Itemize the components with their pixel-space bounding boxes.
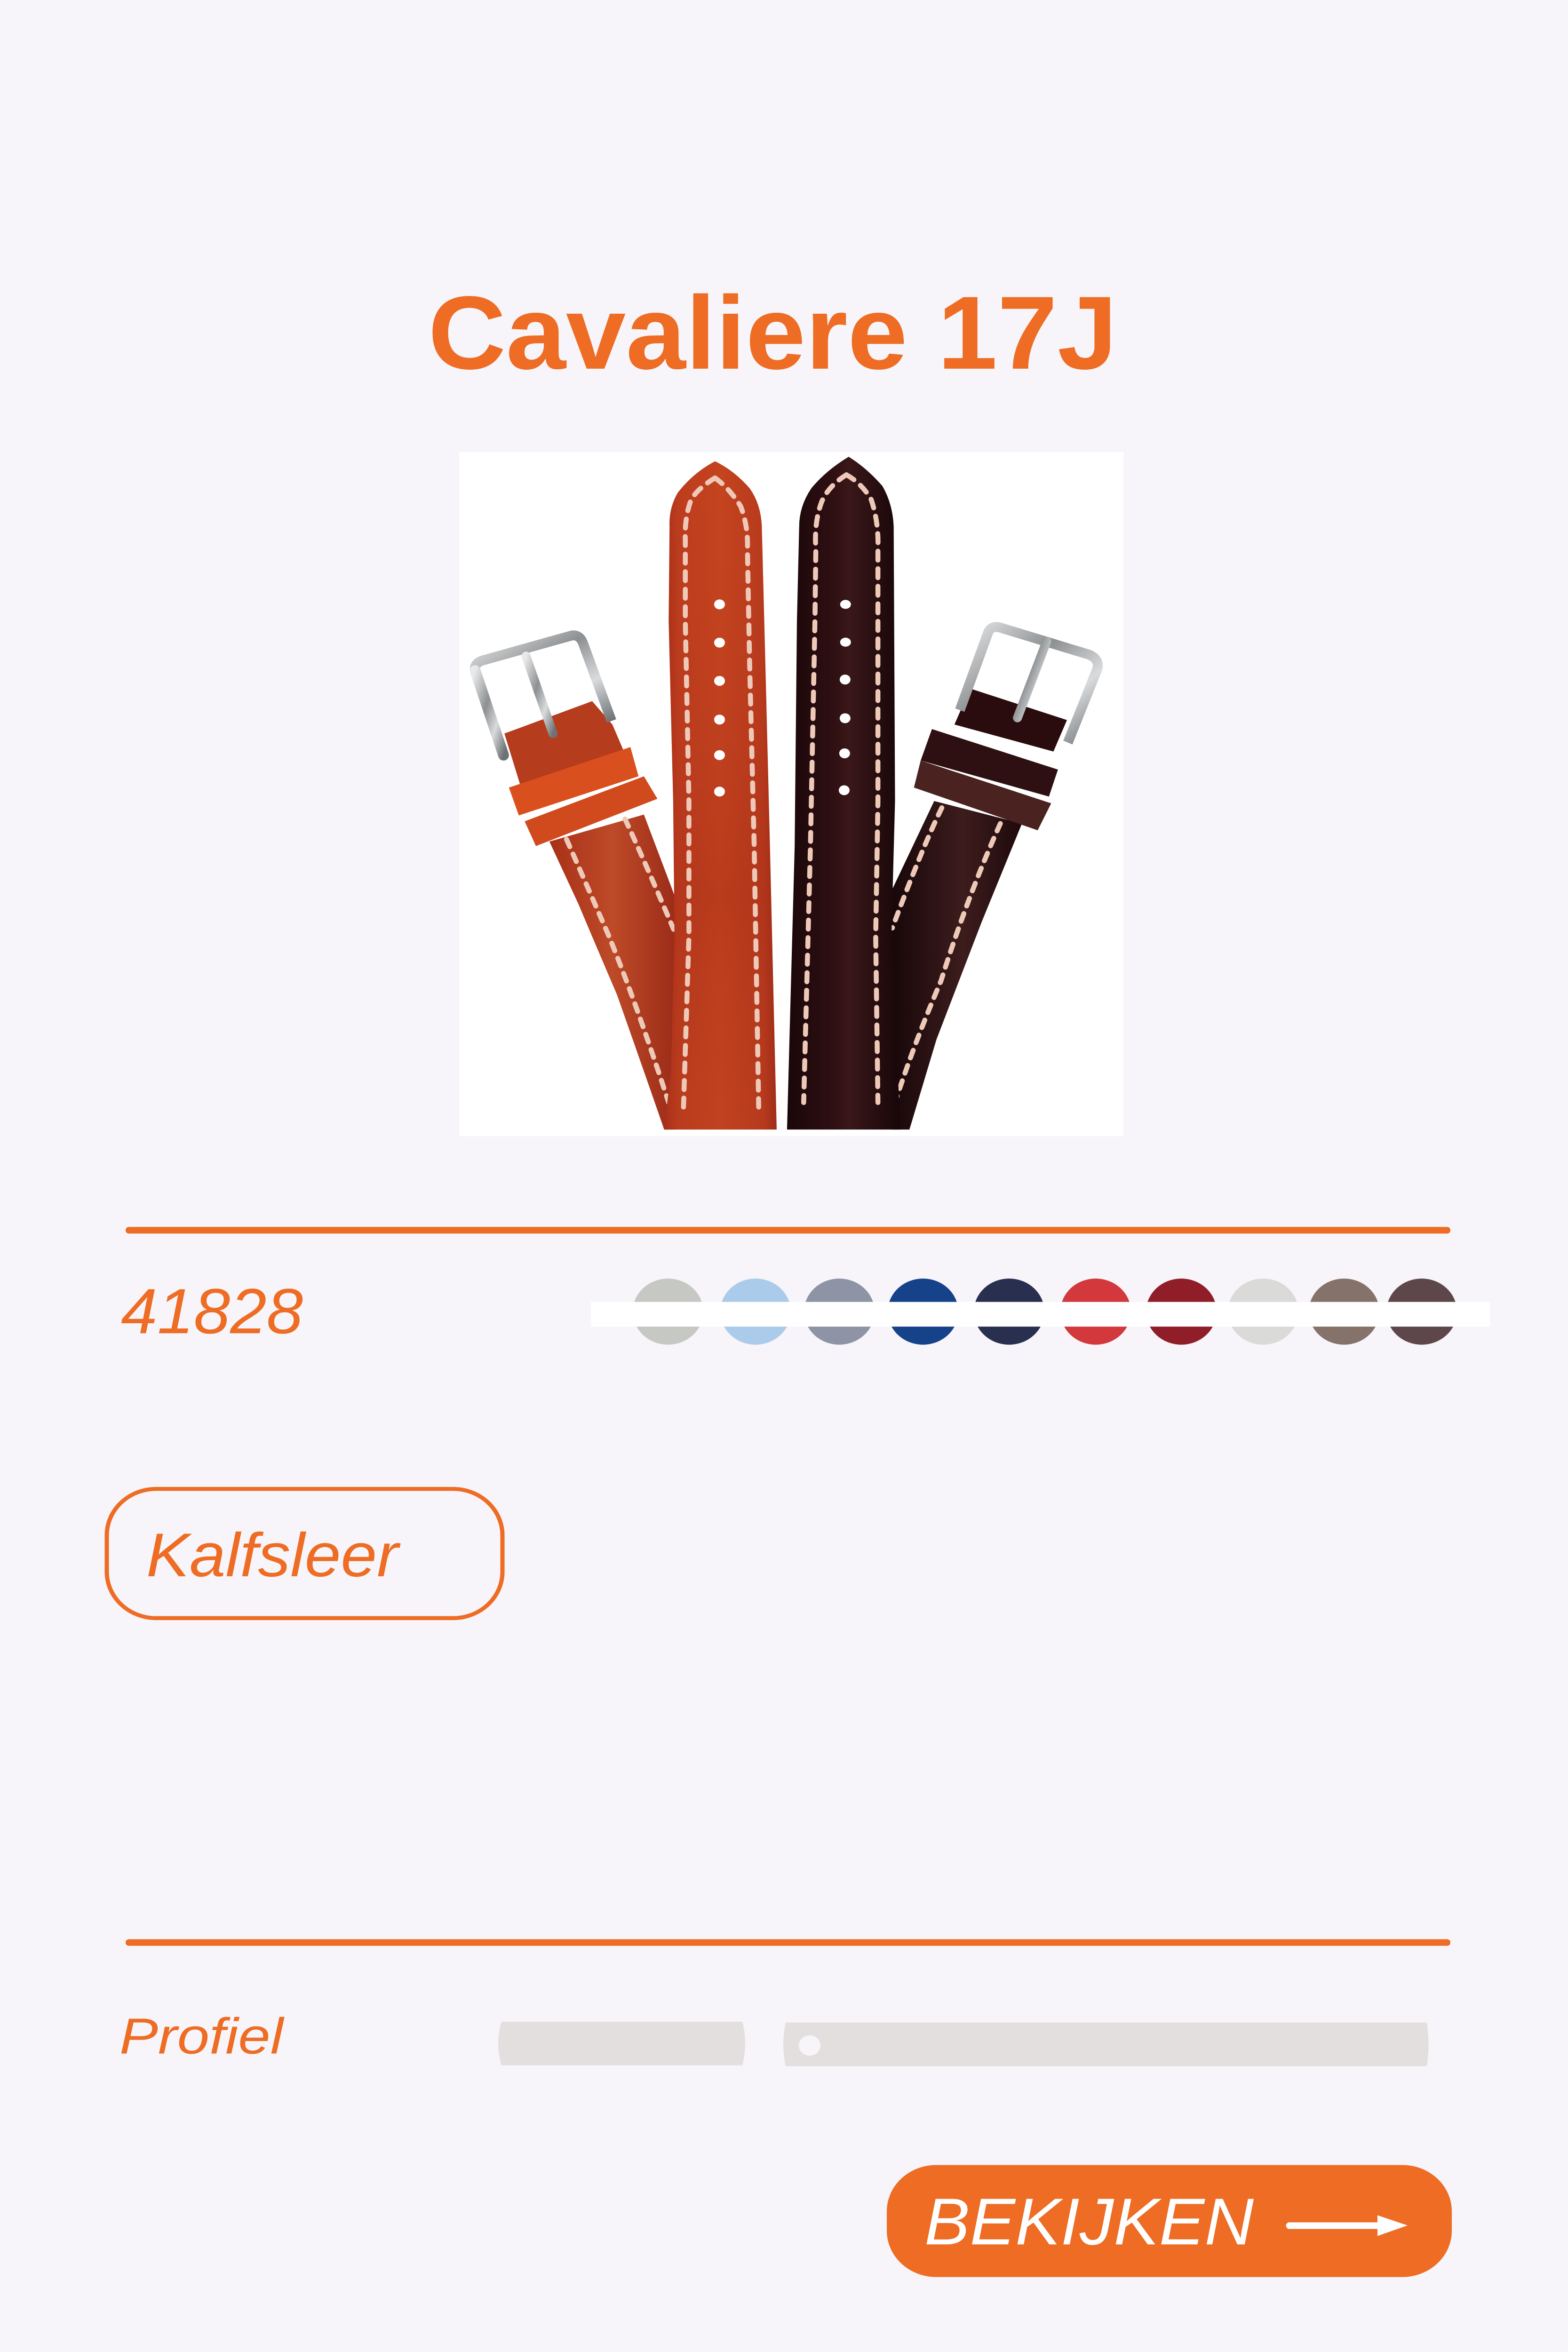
material tag: Kalfsleer <box>146 1520 401 1589</box>
right dark strap <box>891 627 1098 1129</box>
centre dark strap <box>787 457 900 1129</box>
button <box>887 2165 1452 2277</box>
title: Cavaliere 17J <box>428 275 1117 391</box>
profile icon: strap body with hole <box>783 2023 1428 2066</box>
colour swatches <box>591 1279 1490 1345</box>
profile label: Profiel <box>119 2008 285 2064</box>
top divider line <box>126 1227 1450 1233</box>
bottom divider line <box>126 1939 1450 1946</box>
button: BEKIJKEN <box>924 2185 1254 2258</box>
centre red strap <box>664 461 777 1129</box>
product image: watch straps <box>459 452 1123 1136</box>
icon: arrow <box>1286 2215 1408 2236</box>
material tag <box>107 1489 502 1618</box>
profile icon: strap keeper <box>498 2022 745 2066</box>
article number: 41828 <box>121 1275 303 1347</box>
left red strap <box>475 636 676 1129</box>
